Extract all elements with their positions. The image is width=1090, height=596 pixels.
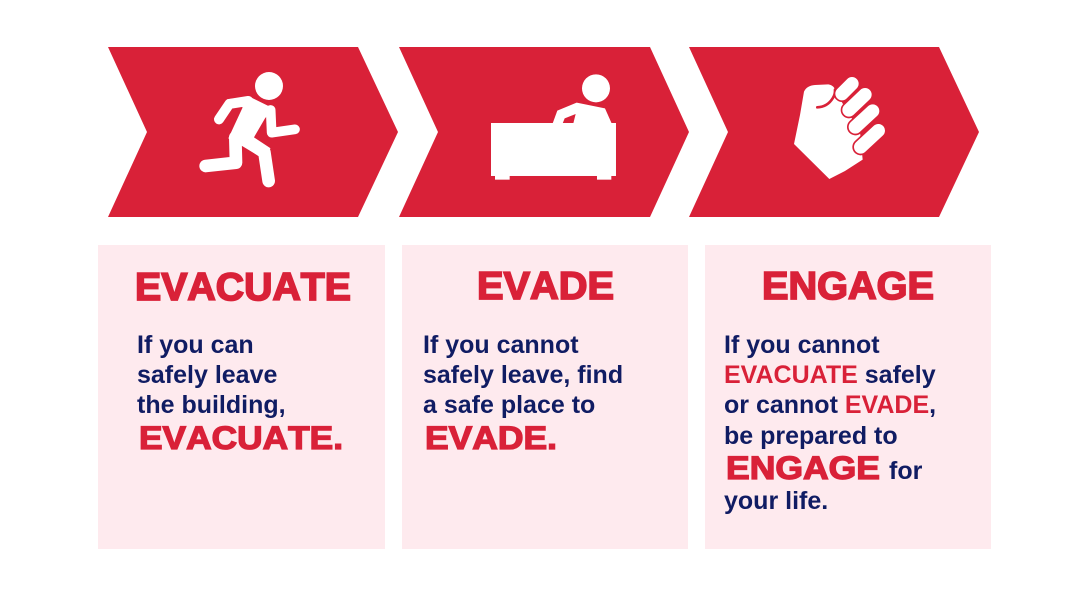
text block: evacuate instructions bbox=[137, 331, 343, 456]
panel: evacuate bbox=[98, 245, 385, 549]
text block: evade instructions: If you cannot bbox=[423, 331, 579, 359]
text block: evade instructions: a safe place to bbox=[423, 391, 595, 419]
chevron: engage bbox=[689, 47, 979, 217]
chevron: evade bbox=[399, 47, 689, 217]
text block: evade instructions: EVADE. bbox=[425, 420, 557, 456]
text block: engage instructions: or cannot EVADE, bbox=[724, 391, 936, 419]
heading: evade: EVADE bbox=[477, 265, 614, 308]
text block: evade instructions bbox=[423, 331, 623, 456]
text block: evacuate instructions: safely leave bbox=[137, 361, 277, 389]
text block: engage instructions: be prepared to bbox=[724, 422, 898, 450]
text block: evade instructions: safely leave, find bbox=[423, 361, 623, 389]
text block: engage instructions: ENGAGE bbox=[726, 450, 880, 486]
text block: evacuate instructions: If you can bbox=[137, 331, 254, 359]
text block: engage instructions: If you cannot bbox=[724, 331, 880, 359]
text block: engage instructions: your life. bbox=[724, 487, 828, 515]
icon: running person bbox=[206, 72, 295, 181]
text block: engage instructions: for bbox=[889, 457, 923, 485]
text block: evacuate instructions: the building, bbox=[137, 391, 286, 419]
text block: evacuate instructions: EVACUATE. bbox=[139, 420, 343, 456]
panel: engage bbox=[705, 245, 991, 549]
heading: evacuate: EVACUATE bbox=[135, 266, 351, 309]
icon: clenched fist bbox=[794, 84, 878, 179]
heading: engage: ENGAGE bbox=[762, 265, 934, 308]
text block: engage instructions: EVACUATE safely bbox=[724, 361, 936, 389]
icon: person behind desk bbox=[491, 74, 616, 180]
chevron: evacuate bbox=[108, 47, 398, 217]
text block: engage instructions bbox=[724, 331, 936, 515]
panel: evade bbox=[402, 245, 688, 549]
